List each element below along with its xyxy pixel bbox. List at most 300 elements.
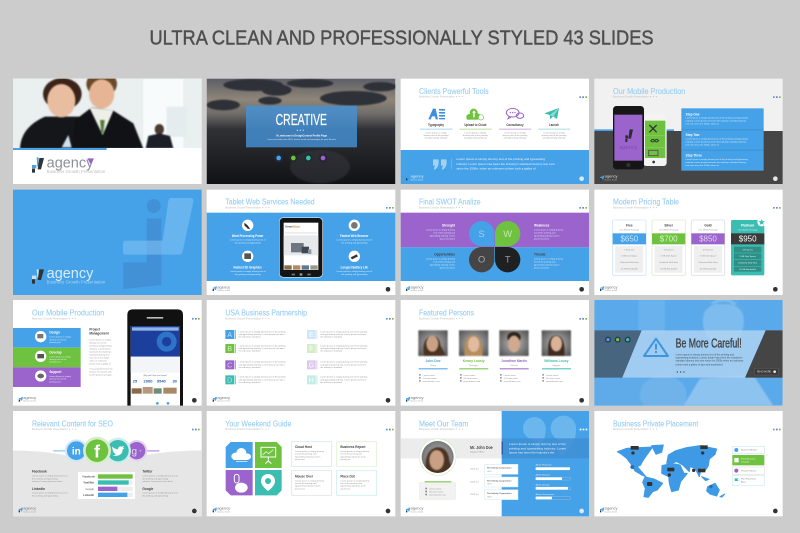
linkedin text bbox=[32, 487, 68, 497]
item A: A bbox=[227, 332, 232, 339]
footer logo: agency bbox=[217, 506, 230, 511]
dark ribbon bbox=[594, 330, 642, 378]
name block: Support Officer bbox=[470, 451, 485, 454]
design band: printing and bbox=[49, 341, 61, 344]
strengths text: Lorem ipsum is simply dummy bbox=[426, 229, 456, 232]
tool label: consultancy: and typesetting industry bbox=[504, 137, 527, 140]
swot petal S: S bbox=[479, 229, 485, 239]
opportunities text: text of the printing and bbox=[434, 260, 456, 263]
person: kenny lously: @Lorem name bbox=[463, 377, 478, 380]
service: fastest 3d graphics: Fastest 3D Graphics bbox=[233, 265, 262, 269]
experience rows: The Infinity Corporation bbox=[487, 479, 512, 482]
opportunities text: ipsum has been bbox=[440, 267, 456, 269]
item H: the industry's standard bbox=[320, 381, 343, 384]
person: jonathan martin: @Lorem name bbox=[504, 377, 519, 380]
footer logo: agency bbox=[217, 395, 230, 400]
read more button bbox=[754, 368, 778, 375]
item E: and typesetting industry. Lorem Ipsum has been bbox=[320, 333, 367, 336]
weakness text: text of the printing and bbox=[534, 232, 556, 235]
pricing card: free: Unlimited Web Host bbox=[620, 261, 639, 264]
pricing card: platinum: $950 bbox=[739, 235, 757, 244]
tile: map pin bbox=[255, 470, 282, 495]
contact card: www.domain.com bbox=[429, 494, 446, 496]
heading: Clients Powerful Tools bbox=[419, 86, 489, 96]
item E: E bbox=[309, 332, 314, 339]
project management text: Management bbox=[89, 332, 110, 336]
pricing card: gold bbox=[691, 220, 725, 275]
pricing card: gold: 20 GB Bandwidth bbox=[700, 267, 717, 270]
person: john doe: John Doe bbox=[425, 359, 441, 363]
quote watermark bbox=[523, 416, 576, 438]
person: jonathan martin: Lorem name bbox=[504, 374, 517, 377]
project management text: Project bbox=[89, 327, 101, 331]
service: word processing: Lorem ipsum is simply dummy text of bbox=[230, 239, 266, 242]
footer logo bbox=[213, 395, 230, 403]
linkedin circle bbox=[65, 439, 88, 462]
heading: Business Growth Presentation ✦ ✦ ✦ bbox=[225, 427, 271, 431]
skill bars: Adobe InDesign bbox=[536, 483, 550, 486]
person: john doe: Lorem name bbox=[423, 374, 436, 377]
white dots bbox=[580, 429, 587, 430]
slide 5: clients powerful tools bbox=[401, 79, 589, 184]
box: cloud host: text of the printing and bbox=[295, 453, 317, 456]
footer badge bbox=[192, 398, 197, 403]
tool: consultancy bbox=[506, 108, 524, 119]
tool: launch: dummy text of the printing bbox=[542, 134, 567, 137]
slide 16: business private placement bbox=[594, 411, 783, 516]
tile: cloud bbox=[226, 442, 253, 468]
slide 12: your weekend guide bbox=[207, 411, 395, 516]
project management text: standard dummy text bbox=[89, 353, 110, 356]
opportunities text bbox=[426, 252, 456, 269]
footer logo bbox=[406, 395, 424, 403]
item F: the industry's standard bbox=[320, 350, 343, 353]
google text bbox=[142, 487, 178, 497]
tool: typography: Lorem ipsum is simply bbox=[425, 131, 448, 134]
heading bbox=[419, 308, 474, 320]
swot petal O: O bbox=[478, 255, 485, 265]
project management text: It was popularised in the bbox=[89, 368, 113, 371]
world map bbox=[617, 445, 725, 497]
box: place dot: ipsum has bbox=[340, 488, 350, 490]
steps panel: Lorem Ipsum is simply dummy text of the printing and typesetting bbox=[686, 137, 749, 140]
item D: Lorem Ipsum is simply dummy text of the printing bbox=[239, 376, 286, 379]
box: mouse over: Lorem ipsum is simply dummy bbox=[295, 479, 325, 482]
opportunities text: typesetting industry Lorem bbox=[430, 263, 455, 266]
footer logo: Business Growth bbox=[217, 289, 230, 292]
heading: Final SWOT Analize bbox=[419, 197, 481, 207]
pricing card: gold: Gold bbox=[704, 223, 712, 227]
pricing card: platinum: 5 GB Disk Space bbox=[739, 256, 757, 258]
service: fastest 3d graphics bbox=[230, 251, 266, 276]
item F: Lorem Ipsum is simply dummy text of the printing bbox=[320, 344, 368, 347]
footer logo bbox=[19, 395, 36, 403]
bar chart: Facebook bbox=[82, 475, 95, 479]
footer logo: Business Growth bbox=[411, 400, 423, 403]
pricing card: platinum: Unlimited Web Host bbox=[738, 262, 758, 265]
footer logo: Business Growth bbox=[411, 289, 423, 292]
footer logo: Business Growth bbox=[605, 178, 617, 181]
box: mouse over: Mouse Over bbox=[295, 474, 314, 478]
service: fastest web browser bbox=[337, 220, 372, 245]
heading: Business Growth Presentation ✦ ✦ ✦ bbox=[225, 316, 271, 320]
pricing card: free: One Month Package bbox=[619, 228, 640, 231]
item B: B bbox=[227, 346, 232, 353]
experience rows: CEO bbox=[487, 471, 492, 473]
support band bbox=[13, 367, 81, 387]
slide 1: agency cover bbox=[13, 71, 202, 184]
google plus circle bbox=[126, 440, 147, 461]
facebook circle: f bbox=[94, 441, 101, 461]
steps panel: Lorem Ipsum is simply dummy text of the printing and typesetting bbox=[686, 117, 749, 120]
service: word processing: Word Processing Power bbox=[232, 234, 264, 238]
tablet mockup bbox=[279, 218, 323, 277]
person: williams lousy: Williams Lousy bbox=[544, 359, 569, 363]
agency logo bbox=[32, 155, 106, 174]
item H bbox=[307, 375, 368, 384]
contact card bbox=[419, 481, 456, 500]
service: longest battery life: the printing and typesetting bbox=[341, 273, 368, 276]
person: williams lousy bbox=[542, 330, 571, 383]
legend: from business location: From Business bbox=[741, 457, 755, 460]
footer logo bbox=[600, 506, 618, 513]
pricing card: silver: 5 GB Disk Space bbox=[660, 256, 678, 258]
twitter text bbox=[142, 470, 178, 483]
item D: D bbox=[227, 377, 232, 384]
design band: Lorem Ipsum is simply bbox=[49, 336, 72, 339]
heading bbox=[225, 308, 307, 320]
contact card: Lorem name bbox=[429, 487, 442, 490]
heading bbox=[419, 197, 481, 209]
quote text bbox=[502, 442, 567, 455]
footer badge bbox=[579, 287, 584, 292]
smartphone mockup: 2000 bbox=[144, 379, 153, 384]
box: business report: ipsum has bbox=[340, 459, 350, 461]
swot petal W: W bbox=[503, 229, 512, 239]
smartphone mockup: 30 bbox=[172, 379, 178, 384]
google text: Google bbox=[142, 487, 153, 491]
legend: private partners: Private Partners bbox=[741, 469, 756, 472]
quote text: Ipsum has been the industry's the bbox=[509, 451, 555, 455]
threats text: typesetting industry Lorem bbox=[534, 263, 559, 266]
tool: launch bbox=[538, 108, 570, 140]
steps panel: Step Three bbox=[686, 154, 702, 158]
experience rows bbox=[470, 464, 518, 500]
welcome panel bbox=[246, 106, 357, 147]
support band: dummy text of the bbox=[49, 378, 67, 381]
steps panel bbox=[681, 108, 764, 171]
person: kenny lously bbox=[459, 330, 488, 383]
linkedin circle: in bbox=[72, 446, 81, 457]
footer logo: agency bbox=[605, 174, 618, 179]
footer logo: agency bbox=[605, 506, 618, 511]
twitter circle bbox=[105, 438, 131, 464]
pricing card: gold: One Month Package bbox=[698, 228, 719, 231]
heading bbox=[419, 86, 489, 99]
tool: typography: and typesetting industry bbox=[425, 137, 448, 140]
pricing card: silver: Unlimited Web Host bbox=[659, 261, 679, 264]
tool label: consultancy: dummy text of the printing bbox=[503, 134, 528, 137]
twitter text: Lorem ipsum is simply dummy text of bbox=[142, 475, 178, 478]
service: word processing bbox=[230, 220, 266, 245]
slide 7: final swot analize bbox=[401, 190, 589, 295]
pricing card: free: $650 bbox=[620, 235, 639, 244]
footer badge bbox=[386, 398, 390, 403]
footer logo: Business Growth bbox=[411, 178, 423, 181]
item E: the industry's standard bbox=[320, 336, 343, 339]
heading bbox=[613, 418, 699, 431]
legend: from business location bbox=[732, 455, 764, 465]
pricing card: free: 20 GB Bandwidth bbox=[621, 267, 639, 270]
facebook text: Lorem ipsum is simply dummy text of bbox=[32, 475, 68, 478]
service: longest battery life: Lorem ipsum is simply dummy text of bbox=[337, 270, 372, 273]
tool: typography bbox=[420, 109, 452, 140]
slide 14: be more careful bbox=[594, 298, 783, 415]
tool: typography: Typography bbox=[428, 123, 444, 127]
agency logo bbox=[32, 266, 106, 285]
item C: the industry's standard bbox=[239, 366, 261, 369]
steps panel: industry. Lorem Ipsum has been the industry's standard dummy bbox=[686, 140, 747, 143]
footer logo: agency bbox=[411, 395, 424, 400]
bar chart: TwallNet bbox=[83, 481, 94, 485]
pricing card: free: Free bbox=[626, 223, 633, 227]
box: business report: typesetting industry Lorem bbox=[340, 455, 366, 458]
support band: printing and bbox=[49, 380, 61, 383]
quote band: industry. Lorem Ipsum has been the industry's standard dummy text ever bbox=[456, 162, 555, 166]
project management text: release of Letraset with bbox=[89, 371, 112, 374]
contact card: @Lorem name bbox=[429, 490, 444, 493]
pricing card: gold: 3 Features bbox=[703, 248, 713, 251]
pricing card: silver: 20 GB Bandwidth bbox=[660, 267, 678, 270]
opportunities text: Lorem ipsum is simply dummy bbox=[426, 257, 456, 260]
legend: plan placement area: Plan Placement bbox=[741, 478, 756, 481]
agency logo: Business Growth Presentation bbox=[47, 169, 106, 174]
item B: Lorem Ipsum is simply dummy text of the printing bbox=[239, 344, 286, 347]
background portrait bbox=[594, 298, 773, 415]
quote text: Lorem Ipsum is simply dummy text of the bbox=[509, 442, 566, 446]
person: john doe: www.domain.com bbox=[423, 381, 440, 383]
item B bbox=[225, 344, 286, 353]
footer badge bbox=[579, 398, 584, 403]
twitter text: the printing and typesetting bbox=[142, 477, 169, 480]
footer logo: agency bbox=[411, 506, 424, 511]
develop band: dummy text of the bbox=[49, 358, 67, 361]
strengths text bbox=[426, 224, 456, 241]
footer logo bbox=[19, 506, 36, 513]
pricing card: silver: 3 Features bbox=[664, 248, 674, 251]
box: mouse over: ipsum has bbox=[295, 488, 305, 490]
item A: and typesetting industry. Lorem Ipsum has been bbox=[239, 333, 285, 336]
service: word processing: the printing and typesetting bbox=[235, 242, 261, 245]
pricing card: free: 5 GB Disk Space bbox=[621, 256, 638, 258]
item H: Lorem Ipsum is simply dummy text of the printing bbox=[320, 376, 368, 379]
box: business report bbox=[337, 442, 377, 466]
person: jonathan martin: www.domain.com bbox=[504, 381, 521, 383]
person: williams lousy: Lorem name bbox=[546, 374, 559, 377]
develop band: printing and bbox=[49, 361, 61, 364]
steps panel: text ever since the 1500s, when an bbox=[686, 164, 720, 167]
item A bbox=[225, 330, 286, 339]
pricing card: gold: 5 GB Disk Space bbox=[700, 256, 717, 258]
watermark logo bbox=[123, 198, 194, 289]
heading: Our Mobile Production bbox=[32, 308, 105, 318]
box: business report: text of the printing and bbox=[340, 453, 362, 456]
box: business report: Business Report bbox=[340, 445, 366, 449]
item A: the industry's standard bbox=[239, 336, 261, 339]
footer logo: agency bbox=[411, 174, 424, 179]
item A: Lorem Ipsum is simply dummy text of the printing bbox=[239, 330, 286, 333]
person: kenny lously: www.domain.com bbox=[463, 381, 480, 383]
warning icon bbox=[644, 339, 668, 356]
swot petal O bbox=[469, 247, 494, 272]
develop band bbox=[13, 348, 81, 367]
develop band: Develop bbox=[49, 350, 62, 354]
box: mouse over bbox=[292, 471, 332, 495]
quote band bbox=[401, 150, 589, 184]
tile: mouse hand bbox=[226, 470, 253, 495]
dusk clouds bbox=[207, 79, 397, 110]
threats text: Lorem ipsum is simply dummy bbox=[534, 257, 564, 260]
bar chart: LinkedIn bbox=[83, 493, 95, 497]
person: john doe bbox=[418, 330, 448, 383]
google text: Lorem ipsum is simply dummy text of bbox=[142, 492, 178, 495]
heading: Business Growth Presentation ✦ ✦ ✦ bbox=[32, 316, 77, 320]
person: williams lousy: www.domain.com bbox=[546, 381, 563, 383]
swot petal T: T bbox=[505, 255, 511, 265]
skill bars: Adobe Illustrator bbox=[536, 474, 550, 477]
slide 8: modern pricing table bbox=[594, 190, 783, 295]
item F bbox=[307, 344, 368, 353]
footer logo bbox=[600, 174, 618, 181]
strengths text: typesetting industry Lorem bbox=[430, 235, 455, 238]
heading: Meet Our Team bbox=[419, 418, 468, 428]
agency logo: agency bbox=[47, 266, 94, 282]
legend: from business location: Location bbox=[741, 460, 750, 463]
develop band: Lorem Ipsum is simply bbox=[49, 355, 72, 358]
dot markers bbox=[677, 371, 685, 373]
callout text: Lorem ipsum is simply dummy text of the printing and bbox=[676, 353, 735, 356]
swot petal W bbox=[495, 221, 520, 246]
slide 2: creative bbox=[207, 79, 397, 184]
tool: typography: dummy text of the printing bbox=[424, 134, 449, 137]
box: place dot bbox=[337, 471, 377, 495]
read more button: READ MORE bbox=[757, 370, 772, 373]
item F: F bbox=[309, 346, 313, 353]
star badge bbox=[757, 218, 766, 226]
support band: Support bbox=[49, 370, 62, 374]
steps panel: text ever since the 1500s, when an bbox=[686, 123, 720, 126]
person: jonathan martin: Director bbox=[510, 364, 518, 367]
steps panel: industry. Lorem Ipsum has been the industry's standard dummy bbox=[686, 120, 747, 123]
project management text: Lorem Ipsum passages bbox=[89, 374, 112, 377]
callout heading: Be More Careful! bbox=[676, 337, 742, 351]
heading: Business Growth Presentation ✦ ✦ ✦ bbox=[613, 427, 658, 431]
footer logo bbox=[406, 506, 424, 513]
linkedin text: the printing and typesetting bbox=[32, 494, 59, 497]
service: fastest web browser: Lorem ipsum is simply dummy text of bbox=[337, 239, 372, 242]
facebook circle bbox=[83, 437, 111, 465]
footer badge bbox=[386, 287, 390, 292]
steps panel: Step Two bbox=[686, 133, 700, 137]
heading: USA Business Partnership bbox=[225, 308, 307, 318]
person: jonathan martin: Jonathan Martin bbox=[501, 359, 527, 363]
person: john doe: Owner bbox=[430, 364, 436, 367]
callout text: standard dummy text ever since the 1500s when an unknown bbox=[676, 360, 744, 363]
blue accent bar bbox=[13, 148, 107, 150]
heading: Business Growth Presentation ✦ ✦ ✦ bbox=[419, 95, 464, 99]
service: longest battery life: Longest Battery Life bbox=[341, 265, 368, 269]
box: place dot: Lorem ipsum is simply dummy bbox=[340, 479, 370, 482]
weakness text: ipsum has been bbox=[534, 239, 550, 241]
footer logo: Business Growth bbox=[411, 510, 423, 513]
heading: Tablet Web Services Needed bbox=[225, 197, 315, 207]
item E bbox=[307, 330, 368, 339]
smartphone mockup: Why you'll love our theme? bbox=[143, 374, 168, 377]
pricing card: platinum: Platinum bbox=[741, 223, 755, 227]
footer logo: Business Growth bbox=[605, 510, 617, 513]
footer logo: Business Growth bbox=[23, 400, 36, 403]
item C: C bbox=[227, 362, 232, 369]
person: jonathan martin bbox=[499, 330, 529, 383]
welcome panel: Lorem text with more SEO, brand, visual and strategies for your Service bbox=[267, 138, 337, 141]
tool: launch: Lorem ipsum is simply bbox=[543, 131, 566, 134]
linkedin text: Lorem ipsum is simply dummy text of bbox=[32, 492, 68, 495]
google plus circle: g bbox=[132, 447, 137, 458]
pricing card: platinum: One Month Package bbox=[738, 228, 758, 231]
linkedin text: LinkedIn bbox=[32, 487, 45, 491]
heading: Business Growth Presentation ✦ ✦ ✦ bbox=[225, 205, 271, 209]
box: place dot: text of the printing and bbox=[340, 482, 362, 485]
strengths text: Strenght bbox=[442, 224, 456, 228]
item H: and typesetting industry. Lorem Ipsum has been bbox=[320, 378, 367, 381]
tool label: consultancy bbox=[499, 123, 531, 140]
weakness text bbox=[534, 224, 564, 241]
box: cloud host: ipsum has bbox=[295, 459, 305, 461]
social icons row bbox=[274, 154, 327, 162]
footer logo bbox=[213, 284, 230, 292]
slide 15: meet our team bbox=[401, 411, 589, 516]
map pins bbox=[630, 445, 713, 488]
footer badge bbox=[773, 176, 778, 181]
pricing card: platinum: 20 GB Bandwidth bbox=[739, 268, 757, 271]
item G: and typesetting industry. Lorem Ipsum has been bbox=[320, 363, 367, 366]
social ribbon bbox=[53, 450, 159, 452]
light parallelogram bbox=[622, 330, 766, 378]
service: fastest web browser: Fastest Web Browser bbox=[340, 234, 369, 238]
opportunities text: Opportunities bbox=[434, 252, 455, 256]
pricing card: free: 3 Features bbox=[624, 248, 634, 251]
pricing card: gold: $850 bbox=[699, 235, 717, 244]
item G: G bbox=[309, 362, 314, 369]
steps panel: industry. Lorem Ipsum has been the industry's standard dummy bbox=[686, 161, 747, 164]
experience rows: The Infinity Corporation bbox=[487, 492, 512, 495]
swot petal S bbox=[469, 221, 494, 246]
slide 3: agency blue section bbox=[13, 190, 202, 295]
heading: Featured Persons bbox=[419, 308, 474, 318]
quote band: since the 1500s, when an unknown printer took a galley of bbox=[456, 167, 536, 171]
footer logo: agency bbox=[605, 284, 618, 289]
footer logo: Business Growth bbox=[23, 510, 36, 513]
project management text: industry. Lorem Ipsum bbox=[89, 347, 111, 350]
heading: Business Private Placement bbox=[613, 418, 699, 428]
item D bbox=[225, 375, 286, 384]
project management text bbox=[89, 327, 113, 377]
steps panel: Lorem Ipsum is simply dummy text of the printing and typesetting bbox=[686, 158, 749, 161]
item D: and typesetting industry. Lorem Ipsum has been bbox=[239, 378, 285, 381]
pricing card: silver: $700 bbox=[660, 235, 678, 244]
item G: the industry's standard bbox=[320, 366, 343, 369]
box: place dot: typesetting industry Lorem bbox=[340, 485, 366, 488]
